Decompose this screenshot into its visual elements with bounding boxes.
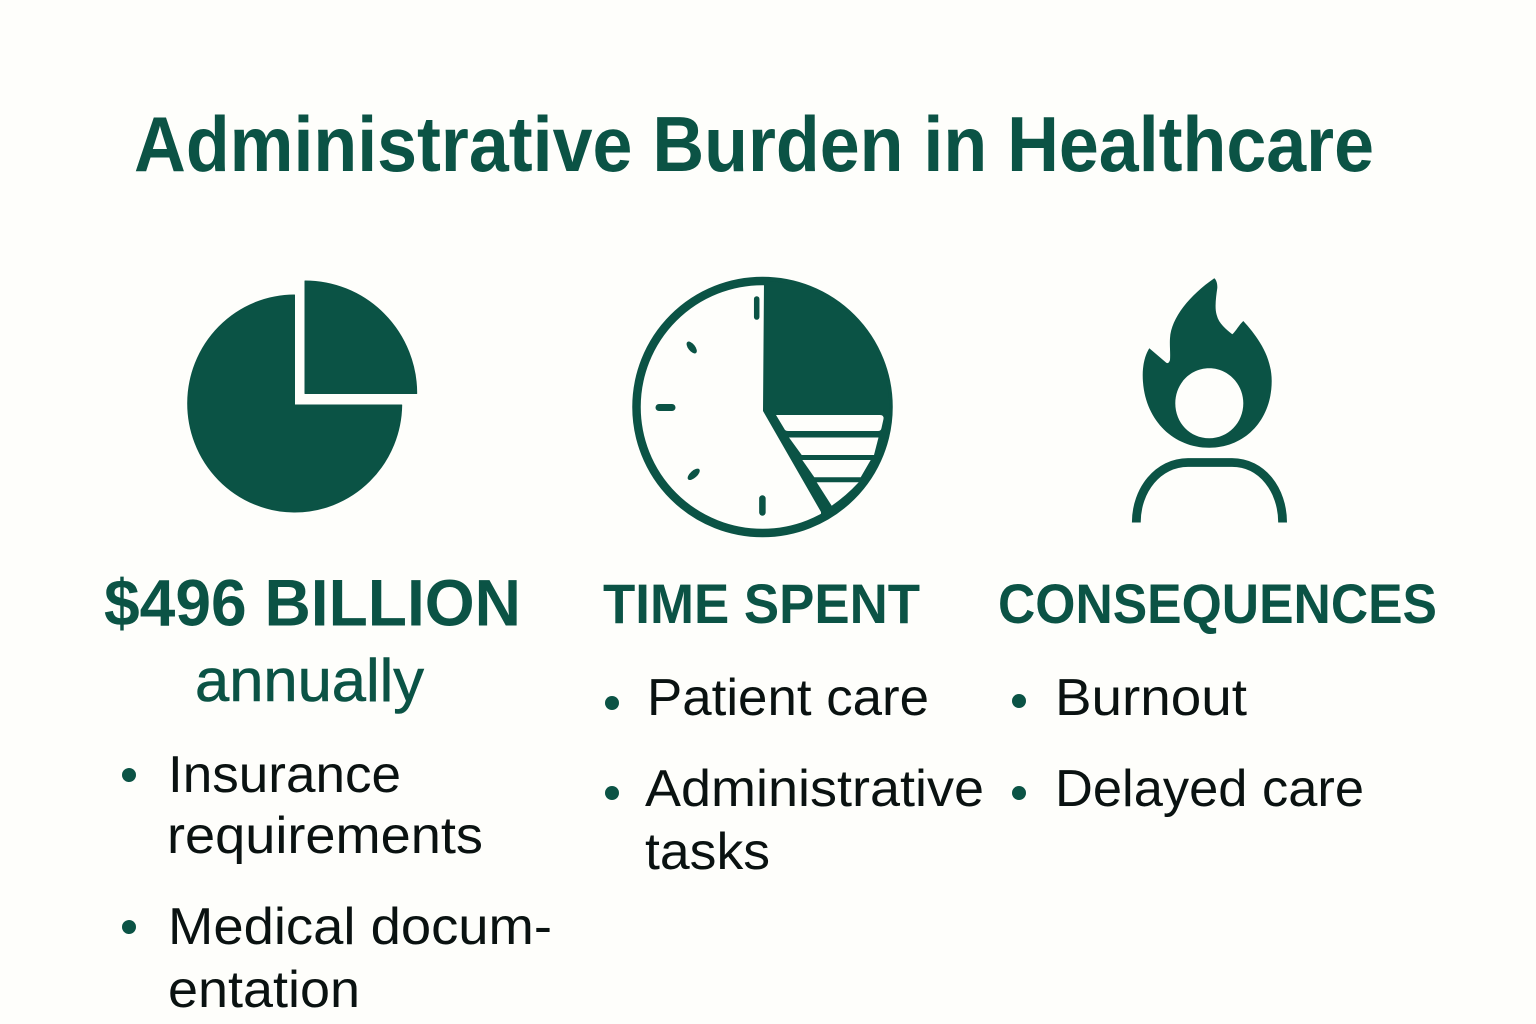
list: time spent: tasks [645, 823, 770, 881]
heading: $496 billion: $496 BILLION [104, 566, 521, 640]
title: Administrative Burden in Healthcare [134, 100, 1374, 188]
heading: annually: annually [195, 647, 424, 714]
list: consequences [1012, 669, 1364, 818]
list: time spent: Administrative [645, 760, 984, 818]
icon: clock [636, 281, 889, 533]
heading: consequences: CONSEQUENCES [998, 572, 1437, 635]
list: cost drivers: entation [168, 961, 360, 1019]
list: cost drivers: Insurance [168, 746, 401, 804]
list: cost drivers [122, 746, 552, 1019]
list: time spent [605, 669, 984, 881]
list: consequences: Delayed care [1055, 760, 1364, 818]
icon: burnout person [1136, 278, 1283, 522]
list: cost drivers: requirements [167, 807, 483, 865]
list: consequences: Burnout [1055, 669, 1248, 727]
heading: time spent: TIME SPENT [603, 572, 920, 635]
list: cost drivers: Medical docum- [168, 898, 552, 956]
icon: pie chart [188, 281, 417, 512]
list: time spent: Patient care [647, 669, 929, 727]
